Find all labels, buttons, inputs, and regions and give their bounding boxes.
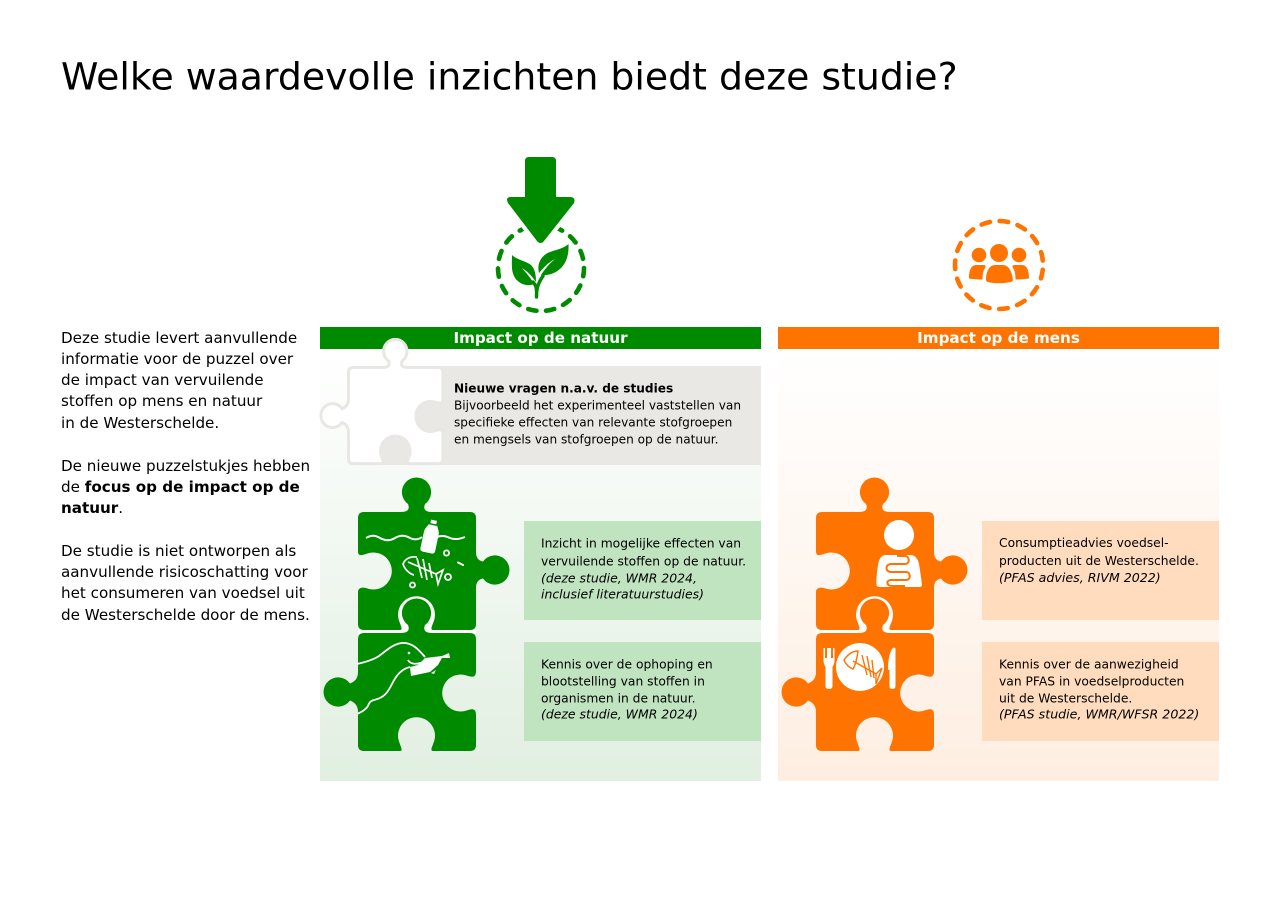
orange box: aanwezigheid bbox=[982, 642, 1219, 741]
green box: effecten bbox=[524, 521, 761, 620]
green box: ophoping: Kennis over de ophoping en bbox=[541, 658, 713, 672]
intro text block: de impact van vervuilende bbox=[61, 371, 264, 389]
grey box: nieuwe vragen: Nieuwe vragen n.a.v. de studies bbox=[454, 382, 673, 396]
intro text block bbox=[61, 329, 310, 624]
intro text block: Deze studie levert aanvullende bbox=[61, 329, 297, 347]
orange box: aanwezigheid: Kennis over de aanwezigheid bbox=[999, 658, 1179, 672]
orange box: consumptieadvies bbox=[982, 521, 1219, 620]
intro text block: het consumeren van voedsel uit bbox=[61, 584, 305, 602]
icon: person with intestines bbox=[876, 520, 922, 587]
orange box: aanwezigheid: uit de Westerschelde. bbox=[999, 692, 1132, 706]
panel: impact op de natuur bbox=[320, 327, 761, 781]
green box: ophoping bbox=[524, 642, 761, 741]
title: Welke waardevolle inzichten biedt deze studie? bbox=[61, 54, 958, 98]
green box: effecten: vervuilende stoffen op de natuur. bbox=[541, 554, 746, 568]
intro text block: informatie voor de puzzel over bbox=[61, 350, 294, 368]
icon: seal with fish bbox=[357, 643, 450, 714]
panel background natuur bbox=[320, 349, 761, 781]
icon: dashed circle with plant bbox=[498, 225, 584, 311]
panel background mens bbox=[778, 349, 1219, 781]
intro text block: aanvullende risicoschatting voor bbox=[61, 563, 309, 581]
header mens bbox=[778, 327, 1219, 349]
puzzle piece: human digestion bbox=[816, 478, 967, 634]
green box: ophoping: organismen in de natuur. bbox=[541, 692, 696, 706]
green box: effecten: inclusief literatuurstudies) bbox=[541, 586, 704, 602]
intro text block: De nieuwe puzzelstukjes hebben bbox=[61, 457, 310, 475]
puzzle piece: food plate bbox=[782, 599, 934, 751]
header natuur: Impact op de natuur bbox=[453, 329, 628, 347]
intro text block: natuur. bbox=[61, 499, 123, 517]
panel: impact op de mens bbox=[778, 327, 1219, 781]
intro text block: stoffen op mens en natuur bbox=[61, 392, 263, 410]
orange box: aanwezigheid: van PFAS in voedselproducten bbox=[999, 674, 1184, 688]
green box: effecten: (deze studie, WMR 2024, bbox=[541, 570, 697, 586]
icon: arrow down bbox=[507, 157, 574, 243]
icon: people in dashed circle bbox=[955, 221, 1043, 309]
intro text block: de Westerschelde door de mens. bbox=[61, 606, 310, 624]
puzzle piece: empty outline bbox=[321, 339, 443, 464]
puzzle piece: pollution bbox=[358, 478, 509, 634]
orange box: consumptieadvies: producten uit de Westerschelde. bbox=[999, 554, 1199, 568]
orange box: consumptieadvies: (PFAS advies, RIVM 2022) bbox=[999, 570, 1161, 585]
green box: ophoping: (deze studie, WMR 2024) bbox=[541, 706, 698, 722]
icon: plate with fish, fork and knife bbox=[824, 643, 896, 691]
grey box: nieuwe vragen: en mengsels van stofgroepen op de natuur. bbox=[454, 432, 718, 446]
grey box: nieuwe vragen: Bijvoorbeeld het experimenteel vaststellen van bbox=[454, 398, 741, 412]
icon: water, bottle and fish skeleton bbox=[366, 519, 465, 588]
intro text block: De studie is niet ontworpen als bbox=[61, 542, 296, 560]
orange box: consumptieadvies: Consumptieadvies voedsel- bbox=[999, 536, 1169, 550]
puzzle piece: seal bbox=[324, 599, 476, 751]
orange box: aanwezigheid: (PFAS studie, WMR/WFSR 2022) bbox=[999, 706, 1199, 722]
green box: effecten: Inzicht in mogelijke effecten van bbox=[541, 536, 741, 550]
header mens: Impact op de mens bbox=[917, 329, 1080, 347]
intro text block: de focus op de impact op de bbox=[61, 478, 300, 496]
grey box: nieuwe vragen: specifieke effecten van relevante stofgroepen bbox=[454, 416, 732, 430]
grey box: nieuwe vragen bbox=[375, 366, 761, 465]
header natuur bbox=[320, 327, 761, 349]
intro text block: in de Westerschelde. bbox=[61, 414, 219, 432]
green box: ophoping: blootstelling van stoffen in bbox=[541, 674, 705, 688]
